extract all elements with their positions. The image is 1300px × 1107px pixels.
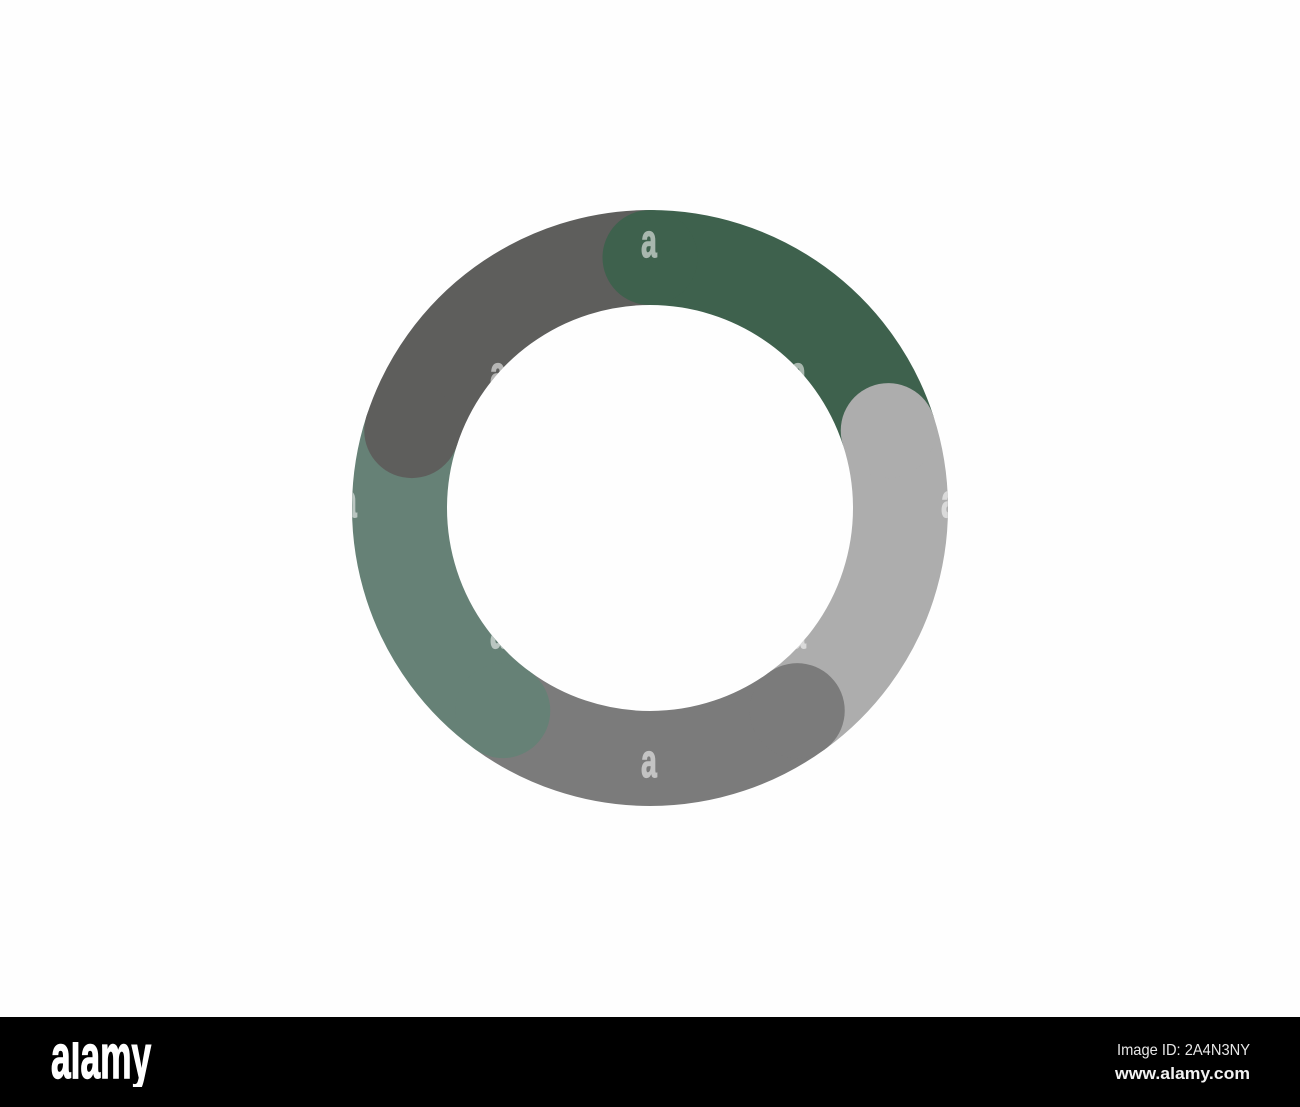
website address: www.alamy.com: [1114, 1065, 1250, 1083]
footer logo: alamy: [51, 1021, 151, 1092]
segment: sage teal arc: [399, 431, 503, 711]
segment: dark grey arc: [412, 258, 650, 431]
segment: light grey arc: [797, 431, 901, 711]
watermark letters on the ring: a: [790, 348, 806, 400]
watermark letters on the ring: a: [641, 736, 657, 788]
watermark letters on the ring: a: [641, 216, 657, 268]
footer band: [0, 1017, 1300, 1107]
image id: Image ID: 2A4N3NY: [1117, 1042, 1250, 1059]
rounded segment caps: [364, 210, 936, 758]
segment: mid grey arc: [503, 711, 797, 759]
watermark letters on the ring: a: [341, 476, 357, 528]
watermark letters on the ring: a: [790, 607, 806, 659]
watermark letters on the ring: a: [490, 607, 506, 659]
segmented donut ring: [364, 210, 936, 759]
segment: dark green arc: [650, 258, 888, 431]
watermark letters on the ring: a: [941, 476, 957, 528]
watermark letters on the ring: [341, 216, 957, 788]
watermark letters on the ring: a: [490, 348, 506, 400]
